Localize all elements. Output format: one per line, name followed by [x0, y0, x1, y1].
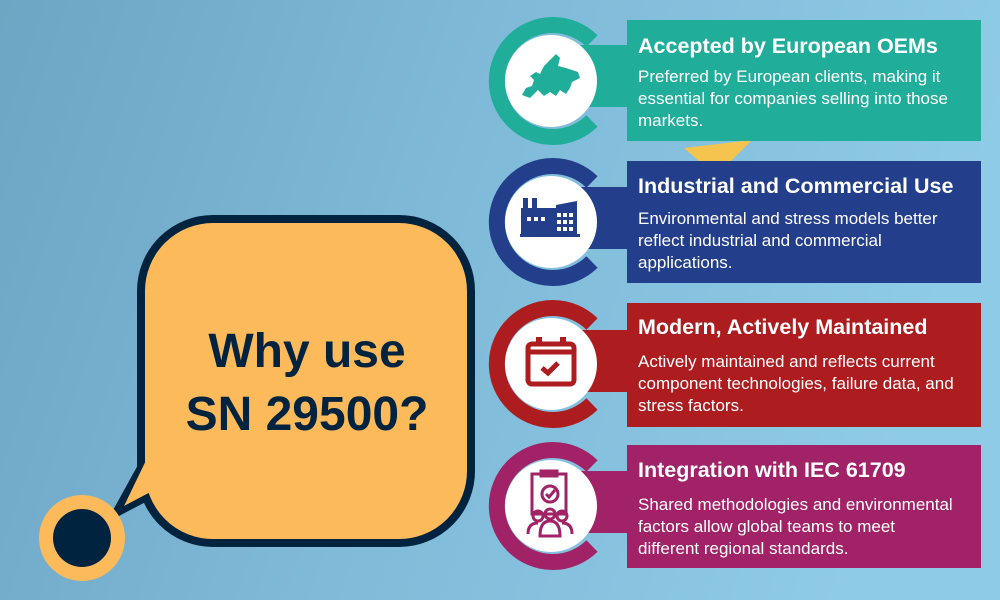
- panel: Industrial and Commercial Use: [497, 161, 981, 283]
- panel: European OEMs: [497, 20, 981, 141]
- panel: Modern, Actively Maintained: Actively maintained and reflects current: [638, 352, 935, 371]
- panel: Integration with IEC 61709: Shared methodologies and environmental: [638, 495, 953, 514]
- panel: Modern, Actively Maintained: component technologies, failure data, and: [638, 374, 954, 393]
- anchor dot: [39, 495, 125, 581]
- panel: Industrial and Commercial Use: Environmental and stress models better: [638, 209, 938, 228]
- panel: European OEMs: Preferred by European clients, making it: [638, 67, 941, 86]
- decoration: yellow plane: [684, 140, 752, 162]
- panel: Integration with IEC 61709: different regional standards.: [638, 539, 848, 558]
- icon: clipboard team: [528, 471, 572, 536]
- panel: Modern, Actively Maintained: [497, 303, 981, 427]
- bubble tail: [116, 455, 160, 513]
- panel: European OEMs: Accepted by European OEMs: [638, 34, 938, 58]
- panel: Industrial and Commercial Use: applications.: [638, 253, 733, 272]
- panel: European OEMs: markets.: [638, 111, 703, 130]
- panel: Modern, Actively Maintained: stress factors.: [638, 396, 744, 415]
- speech bubble: [116, 219, 471, 543]
- panel: Industrial and Commercial Use: Industrial and Commercial Use: [638, 174, 953, 198]
- panel: Integration with IEC 61709: [497, 445, 981, 568]
- panel: Industrial and Commercial Use: reflect industrial and commercial: [638, 231, 882, 250]
- icon: factory: [520, 198, 580, 237]
- speech bubble: SN 29500?: [186, 388, 428, 441]
- icon: calendar: [528, 344, 574, 384]
- panel: Modern, Actively Maintained: Modern, Actively Maintained: [638, 315, 928, 339]
- panel: Integration with IEC 61709: factors allow global teams to meet: [638, 517, 895, 536]
- panel: Integration with IEC 61709: Integration with IEC 61709: [638, 458, 906, 482]
- panel: European OEMs: essential for companies selling into those: [638, 89, 948, 108]
- bubble text: Why use: [208, 325, 406, 378]
- icon: europe map: [522, 54, 580, 98]
